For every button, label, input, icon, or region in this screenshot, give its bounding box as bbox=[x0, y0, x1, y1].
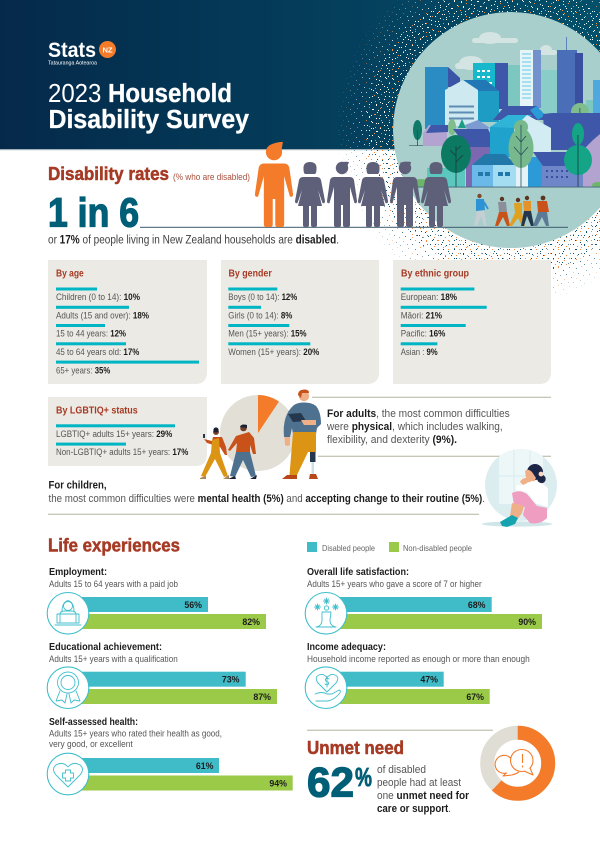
panel: by ethnic group: Māori: 21% bbox=[401, 310, 442, 320]
bars: income adequacy: 67% bbox=[466, 692, 484, 702]
text: unmet need description: one unmet need for bbox=[377, 790, 470, 802]
figure: man with tablet and prosthetic leg bbox=[282, 390, 321, 479]
panel: by LGBTIQ+ status: By LGBTIQ+ status bbox=[56, 405, 138, 416]
block: income adequacy: Household income reported as enough or more than enough bbox=[307, 654, 530, 664]
tree: dark round bbox=[441, 135, 471, 187]
front house bbox=[472, 154, 516, 187]
bars: LGBTIQ+ status bbox=[56, 424, 175, 446]
icon: person at laptop bbox=[47, 592, 89, 634]
icon row: one in six people bbox=[255, 142, 451, 227]
block: self-assessed health: very good, or excellent bbox=[49, 739, 133, 749]
bars: self-assessed health: 94% bbox=[269, 778, 287, 788]
block: overall life satisfaction: Adults 15+ years who gave a score of 7 or higher bbox=[307, 579, 482, 589]
bars: educational achievement: 87% bbox=[253, 692, 271, 702]
city illustration in circle bbox=[393, 12, 600, 253]
cyan tower bbox=[473, 63, 508, 109]
bars: self-assessed health bbox=[68, 758, 293, 790]
text: unmet need description: of disabled bbox=[377, 764, 426, 776]
panel: by gender: By gender bbox=[228, 268, 272, 280]
bars: age bbox=[56, 288, 199, 364]
text: adult difficulties: were physical, which includes walking, bbox=[326, 421, 503, 433]
statistic: 62%: % bbox=[355, 762, 372, 792]
block: income adequacy bbox=[305, 642, 530, 708]
grey female figure bbox=[421, 162, 451, 227]
grey male figure bbox=[390, 162, 420, 227]
person: blue top bbox=[474, 194, 488, 226]
block: educational achievement: Adults 15+ years with a qualification bbox=[49, 654, 178, 664]
person: rust top bbox=[533, 196, 549, 226]
text: unmet need description: care or support. bbox=[377, 803, 451, 815]
text: unmet need description bbox=[377, 764, 470, 815]
panel: by age: By age bbox=[56, 268, 84, 280]
grey male figure bbox=[327, 162, 357, 227]
icon: head with sparkles bbox=[305, 592, 347, 634]
bars: employment bbox=[68, 597, 266, 629]
heading: life experiences: Life experiences bbox=[48, 536, 180, 556]
title: Disability Survey bbox=[48, 106, 250, 134]
legend bbox=[307, 542, 472, 553]
group of walking people bbox=[474, 194, 549, 226]
panel: by LGBTIQ+ status: LGBTIQ+ adults 15+ years: 29% bbox=[56, 429, 172, 439]
block: self-assessed health bbox=[47, 717, 293, 795]
icon: speech bubbles bbox=[495, 749, 533, 776]
Stats NZ logo: Tatauranga Aotearoa bbox=[48, 60, 97, 66]
heading: disability rates: (% who are disabled) bbox=[173, 172, 250, 182]
person: yellow bbox=[509, 198, 525, 226]
panel: by age: Children (0 to 14): 10% bbox=[56, 292, 140, 302]
block: self-assessed health: Self-assessed health: bbox=[49, 717, 138, 728]
bars: overall life satisfaction bbox=[326, 597, 542, 629]
1 in 6 statistic: 1 in 6 bbox=[48, 190, 139, 236]
grey female figure bbox=[295, 162, 325, 227]
heading: disability rates: Disability rates bbox=[48, 163, 169, 184]
text: children difficulties bbox=[48, 480, 485, 505]
icon: award rosette bbox=[47, 667, 89, 708]
text: children difficulties: the most common difficulties were mental health (5%) and accepting change to their routine (5%). bbox=[48, 493, 485, 505]
panel: by age bbox=[48, 260, 207, 384]
block: overall life satisfaction: Overall life satisfaction: bbox=[307, 567, 409, 578]
block: income adequacy: Income adequacy: bbox=[307, 642, 386, 653]
clouds bbox=[455, 32, 557, 70]
summary sentence: or 17% of people living in New Zealand households are disabled. bbox=[48, 234, 339, 246]
legend: Non-disabled people bbox=[403, 543, 472, 553]
bars: overall life satisfaction: 90% bbox=[518, 617, 536, 627]
bars: income adequacy bbox=[326, 672, 490, 704]
title: 2023 Household bbox=[48, 80, 232, 108]
heading: disability rates bbox=[48, 163, 250, 184]
Stats NZ logo: Stats bbox=[48, 39, 96, 62]
bars: overall life satisfaction: 68% bbox=[468, 600, 486, 610]
text: adult difficulties: flexibility, and dexterity (9%). bbox=[327, 434, 457, 446]
statistic: 62%: 62 bbox=[307, 759, 354, 806]
bars: educational achievement: 73% bbox=[222, 674, 240, 684]
text: adult difficulties: For adults, the most common difficulties bbox=[327, 408, 510, 420]
stippled halo around the city circle bbox=[336, 0, 600, 305]
panel: by ethnic group: Pacific: 16% bbox=[401, 329, 445, 339]
right houses bbox=[528, 152, 583, 187]
figure: woman walking bbox=[200, 427, 229, 479]
panel: by age: 15 to 44 years: 12% bbox=[56, 329, 126, 339]
illustration: seated girl by window bbox=[482, 449, 557, 527]
pie chart: adults with physical difficulties bbox=[220, 395, 296, 471]
block: educational achievement bbox=[47, 642, 277, 708]
teal and white house bbox=[490, 115, 551, 157]
bars: ethnic group bbox=[401, 288, 487, 345]
bars: employment: 56% bbox=[184, 600, 202, 610]
panel: by LGBTIQ+ status bbox=[48, 397, 207, 466]
tree: back right bbox=[571, 103, 589, 113]
panel: by gender bbox=[221, 260, 379, 384]
Stats NZ logo bbox=[48, 39, 116, 66]
white house bbox=[445, 80, 499, 126]
panel: by gender: Boys (0 to 14): 12% bbox=[228, 292, 297, 302]
far-left small house and tree bbox=[409, 120, 448, 146]
block: employment bbox=[47, 567, 266, 634]
tall blue tower bbox=[557, 37, 583, 113]
panel: by ethnic group: Asian : 9% bbox=[401, 347, 438, 357]
person: dark trousers bbox=[521, 196, 534, 226]
icon: heart with cross bbox=[47, 753, 89, 795]
text: adult difficulties bbox=[326, 408, 510, 446]
block: overall life satisfaction bbox=[305, 567, 542, 634]
purple house bbox=[453, 129, 490, 187]
panel: by ethnic group: European: 18% bbox=[401, 292, 457, 302]
panel: by age: 45 to 64 years old: 17% bbox=[56, 347, 139, 357]
tree: teal right bbox=[564, 123, 592, 187]
text: unmet need description: people had at least bbox=[377, 777, 461, 789]
panel: by ethnic group bbox=[393, 260, 551, 384]
legend: Disabled people bbox=[322, 543, 375, 553]
panel: by age: Adults (15 and over): 18% bbox=[56, 310, 149, 320]
tree: light green bbox=[508, 120, 534, 187]
figure: man in hoodie bbox=[228, 425, 257, 479]
heading: unmet need: Unmet need bbox=[307, 738, 404, 758]
panel: by LGBTIQ+ status: Non-LGBTIQ+ adults 15+ years: 17% bbox=[56, 447, 188, 457]
block: employment: Employment: bbox=[49, 567, 107, 578]
bars: employment: 82% bbox=[242, 617, 260, 627]
orange person bbox=[255, 142, 293, 227]
white tower bbox=[520, 50, 541, 108]
panel: by gender: Men (15+ years): 15% bbox=[228, 329, 307, 339]
left blue tower bbox=[425, 67, 460, 129]
block: self-assessed health: Adults 15+ years who rated their health as good, bbox=[49, 728, 222, 738]
panel: by gender: Girls (0 to 14): 8% bbox=[228, 310, 292, 320]
icon: hand with heart and dollar bbox=[305, 667, 347, 708]
Stats NZ logo: NZ bbox=[102, 46, 113, 54]
panel: by ethnic group: By ethnic group bbox=[401, 268, 469, 280]
grey female figure bbox=[358, 162, 388, 227]
bars: income adequacy: 47% bbox=[420, 674, 438, 684]
block: employment: Adults 15 to 64 years with a paid job bbox=[49, 579, 178, 589]
panel: by age: 65+ years: 35% bbox=[56, 365, 110, 375]
donut chart: 62% unmet need bbox=[487, 733, 548, 794]
header band bbox=[0, 0, 600, 149]
bars: educational achievement bbox=[68, 672, 277, 704]
bars: gender bbox=[228, 288, 310, 345]
person: orange trousers bbox=[495, 197, 510, 226]
bars: self-assessed health: 61% bbox=[196, 761, 214, 771]
panel: by gender: Women (15+ years): 20% bbox=[228, 347, 319, 357]
title bbox=[48, 80, 250, 134]
text: children difficulties: For children, bbox=[48, 480, 106, 492]
block: educational achievement: Educational achievement: bbox=[49, 642, 162, 653]
